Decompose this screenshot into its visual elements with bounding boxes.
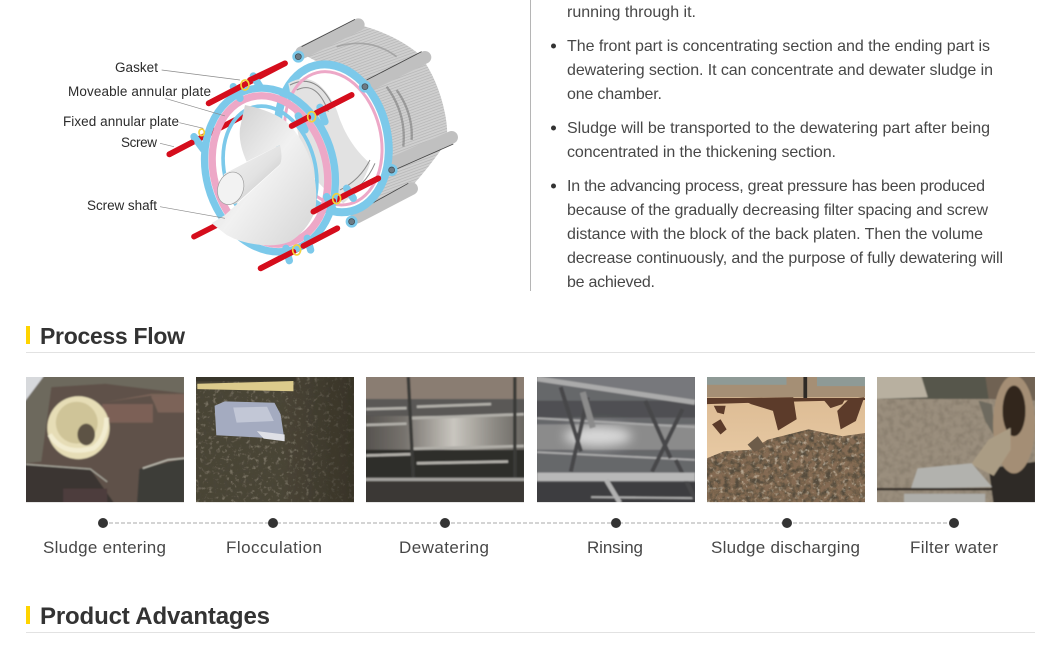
text block: description bullets: concentrated in the thickening section. <box>567 144 836 161</box>
text block: description bullets: The front part is concentrating section and the ending part is <box>567 38 990 55</box>
gray filter body <box>302 19 453 220</box>
text block: description bullets: because of the gradually decreasing filter spacing and screw <box>567 202 988 219</box>
heading: Product Advantages <box>26 603 1035 633</box>
diagram labels: Moveable annular plate <box>68 84 211 99</box>
diagram: screw press cross-section <box>63 19 453 268</box>
step labels: Filter water <box>910 538 998 557</box>
timeline: process steps <box>43 518 998 557</box>
step labels <box>43 538 998 557</box>
step labels: Dewatering <box>399 538 489 557</box>
heading: Product Advantages: Product Advantages <box>40 603 270 630</box>
diagram labels: Screw shaft <box>87 198 157 213</box>
photo: dewatering <box>364 375 527 505</box>
text block: description bullets: decrease continuously, and the purpose of fully dewatering will <box>567 250 1003 267</box>
text block: description bullets: Sludge will be transported to the dewatering part after being <box>567 120 990 137</box>
diagram labels: Gasket <box>115 60 158 75</box>
photo: sludge discharging <box>705 375 868 506</box>
text block: description bullets: running through it. <box>567 4 696 21</box>
plate lugs <box>194 76 353 261</box>
back annular plate <box>263 51 404 228</box>
step labels: Sludge entering <box>43 538 166 557</box>
red screws back <box>169 63 378 268</box>
text block: description bullets: In the advancing process, great pressure has been produced <box>567 178 985 195</box>
heading: Process Flow <box>26 323 1035 353</box>
text block: description bullets: be achieved. <box>567 274 655 291</box>
diagram labels <box>63 60 211 213</box>
front annular plate <box>187 73 353 267</box>
screw blade and shaft <box>212 105 316 245</box>
step labels: Rinsing <box>587 538 643 557</box>
text block: description bullets: dewatering section. It can concentrate and dewater sludge in <box>567 62 993 79</box>
gaskets <box>199 80 341 255</box>
photo: sludge entering <box>24 375 188 504</box>
heading: Process Flow: Process Flow <box>40 323 185 349</box>
photo: filter water <box>875 375 1038 506</box>
photo: flocculation <box>194 375 357 504</box>
diagram labels: Fixed annular plate <box>63 114 179 129</box>
text block: description bullets: distance with the block of the back platen. Then the volume <box>567 226 983 243</box>
back plate lugs <box>292 51 398 228</box>
photo: rinsing <box>535 375 698 504</box>
diagram labels: Screw <box>121 135 157 150</box>
step labels: Sludge discharging <box>711 538 860 557</box>
text block: description bullets: one chamber. <box>567 86 662 103</box>
step labels: Flocculation <box>226 538 322 557</box>
text block: description bullets <box>551 4 1003 291</box>
leader lines <box>160 70 240 218</box>
red screw fronts <box>169 63 378 268</box>
